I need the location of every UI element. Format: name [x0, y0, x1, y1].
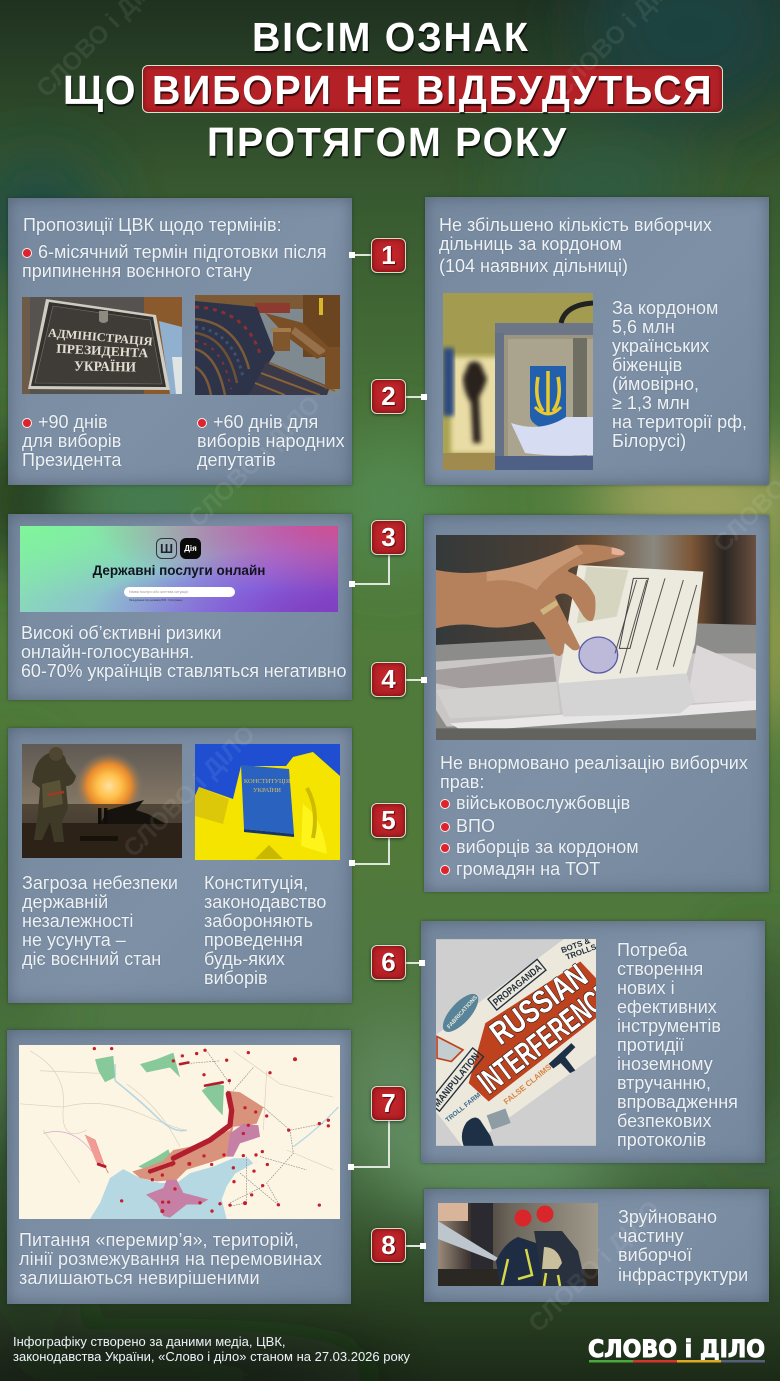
bullet text: +60 days: виборів народних — [197, 431, 345, 451]
text: infrastructure: частину — [618, 1226, 684, 1246]
text: unresolved — [19, 1230, 322, 1288]
text: refugees: біженців — [612, 355, 682, 375]
badge 4: 4 — [381, 664, 396, 694]
photo: parliament hall — [195, 295, 340, 395]
text: threat: діє воєнний стан — [22, 949, 161, 969]
panel: 4 voting rights — [424, 515, 769, 892]
photo: Presidential Office plaque: ПРЕЗИДЕНТА — [56, 341, 149, 360]
bullet text: +90 days: для виборів — [22, 431, 121, 451]
photo: Presidential Office plaque: УКРАЇНИ — [74, 358, 136, 376]
photo: Constitution book on flag: КОНСТИТУЦІЯ — [244, 778, 291, 785]
heading: Пропозиції ЦВК щодо термінів: — [23, 214, 282, 234]
text: interference — [617, 940, 738, 1150]
bullet text: +60 days: депутатів — [197, 450, 276, 470]
title line 2 prefix: ЩО — [63, 67, 137, 113]
text: stations: дільниць за кордоном — [439, 234, 622, 254]
text: unresolved: лінії розмежування на перемовинах — [19, 1249, 322, 1269]
text: interference: впровадження — [617, 1092, 738, 1112]
bullet text: +90 days — [22, 412, 122, 470]
photo: hand with ballot — [436, 535, 756, 740]
panel: 3 online voting — [8, 514, 352, 700]
panel: 5 martial law and constitution — [8, 728, 352, 1003]
connector 2 — [406, 394, 427, 400]
image: Russian interference collage: TROLL FARM — [445, 1091, 483, 1124]
text: refugees: (ймовірно, — [612, 374, 699, 394]
text: threat: незалежності — [22, 911, 133, 931]
text: rights — [440, 753, 748, 792]
text: interference: безпекових — [617, 1110, 711, 1130]
badge 2: 2 — [381, 381, 396, 411]
text: refugees: на території рф, — [612, 412, 747, 432]
text: constitution: забороняють — [204, 911, 313, 931]
text: constitution: виборів — [204, 968, 268, 988]
badge 8 — [371, 1228, 406, 1263]
panel: 7 map — [7, 1030, 351, 1304]
text: rights: прав: — [440, 772, 484, 792]
text: constitution: Конституція, — [204, 872, 308, 892]
photo: soldier and artillery — [22, 744, 182, 858]
text: interference: іноземному — [617, 1054, 713, 1074]
photo: Presidential Office plaque — [22, 297, 182, 394]
text: threat — [22, 872, 178, 970]
text: stations: (104 наявних дільниці) — [439, 256, 628, 276]
badge 7: 7 — [381, 1088, 396, 1118]
photo: firefighters — [438, 1203, 598, 1286]
badge 3 — [371, 520, 406, 555]
text: interference: ефективних — [617, 996, 717, 1016]
footer source note: Інфографіку створено за даними медіа, ЦВК, — [13, 1334, 286, 1349]
text: refugees: ≥ 1,3 млн — [612, 393, 690, 413]
search field: Назва послуги або життєва ситуація — [129, 590, 188, 594]
title — [63, 14, 723, 165]
bullet text: +60 days: +60 днів для — [213, 412, 318, 432]
badge 2 — [371, 379, 406, 414]
image: Russian interference collage: FABRICATIONS — [446, 995, 479, 1030]
icon: Diia: Дія — [184, 544, 197, 553]
list: voter groups — [440, 793, 639, 880]
text: СЛОВО і ДІЛО — [118, 720, 261, 863]
title line 1: ВІСІМ ОЗНАК — [252, 14, 530, 60]
small link below search: Нагадування про державну ВЛК · Опитування — [129, 599, 182, 602]
badge 4 — [371, 662, 406, 697]
panel: 2 polling stations abroad — [425, 197, 769, 485]
text: constitution — [204, 872, 326, 988]
bullet: IDP: ВПО — [456, 816, 495, 836]
text: constitution: проведення — [204, 930, 303, 950]
search field — [124, 587, 235, 597]
badge 5 — [371, 803, 406, 838]
text: interference: протоколів — [617, 1130, 706, 1150]
badge 8: 8 — [381, 1230, 396, 1260]
text: threat: не усунута – — [22, 930, 126, 950]
text: refugees: українських — [612, 336, 709, 356]
text: threat: Загроза небезпеки — [22, 872, 178, 892]
text: online voting risks: онлайн-голосування. — [21, 642, 194, 662]
image: Russian interference collage: FALSE CLAIMS — [502, 1062, 554, 1106]
title highlight box — [142, 65, 723, 113]
panel: 6 foreign interference — [421, 921, 765, 1163]
bullet text: 6 months — [22, 242, 327, 282]
photo: ballot box — [443, 293, 593, 470]
badge 3: 3 — [381, 522, 396, 552]
green zones — [95, 1053, 224, 1170]
title line 3: ПРОТЯГОМ РОКУ — [207, 119, 568, 165]
text: stations — [439, 215, 712, 276]
text: constitution: будь-яких — [204, 949, 285, 969]
badge 1: 1 — [381, 240, 396, 270]
text: threat: державній — [22, 892, 108, 912]
icon: Diia — [180, 538, 201, 559]
connector 3 — [349, 555, 390, 587]
connector 7 — [348, 1121, 390, 1170]
icon: trident — [156, 538, 177, 559]
bullet text: 6 months: 6-місячний термін підготовки після — [38, 242, 327, 262]
text: infrastructure: виборчої — [618, 1245, 692, 1265]
bullet: military: військовослужбовців — [456, 793, 630, 813]
map: front line — [19, 1045, 340, 1219]
connector 8 — [406, 1243, 426, 1249]
text: interference: створення — [617, 958, 703, 978]
text: refugees: 5,6 млн — [612, 317, 675, 337]
badge 6: 6 — [381, 947, 396, 977]
title line 2 highlighted: ВИБОРИ НЕ ВІДБУДУТЬСЯ — [152, 67, 713, 113]
connector 5 — [349, 838, 390, 866]
text: online voting risks — [21, 623, 346, 682]
text: infrastructure: інфраструктури — [618, 1265, 748, 1285]
photo: Presidential Office plaque: АДМІНІСТРАЦІЯ — [47, 325, 154, 349]
bullet: voters abroad: виборців за кордоном — [456, 837, 639, 857]
badge 1 — [371, 238, 406, 273]
image: Russian interference collage — [436, 939, 596, 1146]
panel: 8 destroyed infrastructure — [424, 1189, 769, 1302]
bullet text: +90 days: +90 днів — [38, 412, 108, 432]
text: СЛОВО і ДІЛО — [183, 390, 326, 533]
text: stations: Не збільшено кількість виборчих — [439, 215, 712, 235]
badge 7 — [371, 1086, 406, 1121]
footer source note — [13, 1334, 410, 1364]
text: interference: протидії — [617, 1034, 684, 1054]
banner heading: Державні послуги онлайн — [93, 563, 265, 578]
text: refugees: Білорусі) — [612, 431, 686, 451]
bullet text: 6 months: припинення воєнного стану — [22, 261, 252, 281]
text: infrastructure — [618, 1207, 748, 1286]
connector 4 — [406, 677, 427, 683]
front line strikes — [98, 1062, 232, 1171]
text: online voting risks: 60-70% українців ставляться негативно — [21, 661, 346, 681]
bullet: occupied territories: громадян на ТОТ — [456, 859, 600, 879]
footer source note: законодавства України, «Слово і діло» станом на 27.03.2026 року — [13, 1349, 410, 1364]
bullet text: +90 days: Президента — [22, 450, 121, 470]
text: interference: нових і — [617, 978, 675, 998]
text: interference: Потреба — [617, 940, 688, 960]
text: rights: Не внормовано реалізацію виборчих — [440, 753, 748, 773]
image: Diia portal banner — [20, 526, 338, 612]
bullet text: +60 days — [197, 412, 345, 470]
photo: Constitution book on flag: УКРАЇНИ — [253, 787, 281, 794]
photo: Constitution book on flag — [195, 744, 340, 860]
occupied south and east — [132, 1091, 263, 1181]
text: refugees: За кордоном — [612, 298, 718, 318]
badge 6 — [371, 945, 406, 980]
text: unresolved: залишаються невирішеними — [19, 1268, 260, 1288]
connector 6 — [406, 960, 425, 966]
text: СЛОВО і ДІЛО — [523, 1195, 666, 1338]
text: constitution: законодавство — [204, 892, 326, 912]
text: interference: втручанню, — [617, 1072, 711, 1092]
image: Russian interference collage: PROPAGANDA — [491, 963, 544, 1008]
panel: 1 CEC terms — [8, 198, 352, 485]
text: online voting risks: Високі об’єктивні ризики — [21, 623, 221, 643]
icon: trident: Ш — [160, 541, 173, 556]
sea — [90, 1158, 253, 1219]
badge 5: 5 — [381, 805, 396, 835]
text: interference: інструментів — [617, 1016, 721, 1036]
text: refugees — [612, 298, 747, 452]
connector 1 — [349, 252, 371, 258]
railways — [180, 1051, 323, 1206]
text: unresolved: Питання «перемир’я», територій, — [19, 1230, 299, 1250]
text: infrastructure: Зруйновано — [618, 1207, 717, 1227]
